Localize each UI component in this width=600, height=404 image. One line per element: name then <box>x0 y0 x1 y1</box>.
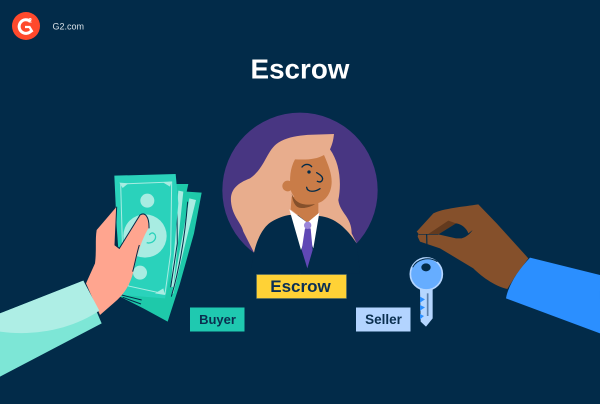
label: Seller <box>356 308 410 332</box>
sleeve <box>506 258 600 333</box>
sleeve <box>0 281 102 377</box>
main bill <box>114 174 178 298</box>
label: Escrow <box>256 274 346 298</box>
shirt collar <box>289 209 319 250</box>
hand <box>417 204 528 289</box>
label: Buyer: Buyer <box>199 312 236 327</box>
illustration: escrow agent <box>222 113 378 273</box>
key <box>410 258 442 327</box>
label: Buyer <box>190 308 244 332</box>
label: Escrow: Escrow <box>270 277 332 296</box>
string <box>425 234 429 264</box>
tie <box>302 222 313 268</box>
hand <box>86 207 148 315</box>
label: Seller: Seller <box>365 312 403 327</box>
brand text: G2.com: G2.com <box>52 22 84 32</box>
back bills <box>120 184 202 322</box>
illustration: seller hand with key <box>410 204 600 333</box>
icon: G2 logo: 2 <box>28 18 32 24</box>
icon: G2 logo <box>12 12 40 40</box>
illustration: buyer hand with cash <box>0 174 202 377</box>
title: Escrow <box>251 54 350 84</box>
neck and face <box>282 155 332 223</box>
suit <box>250 215 360 273</box>
